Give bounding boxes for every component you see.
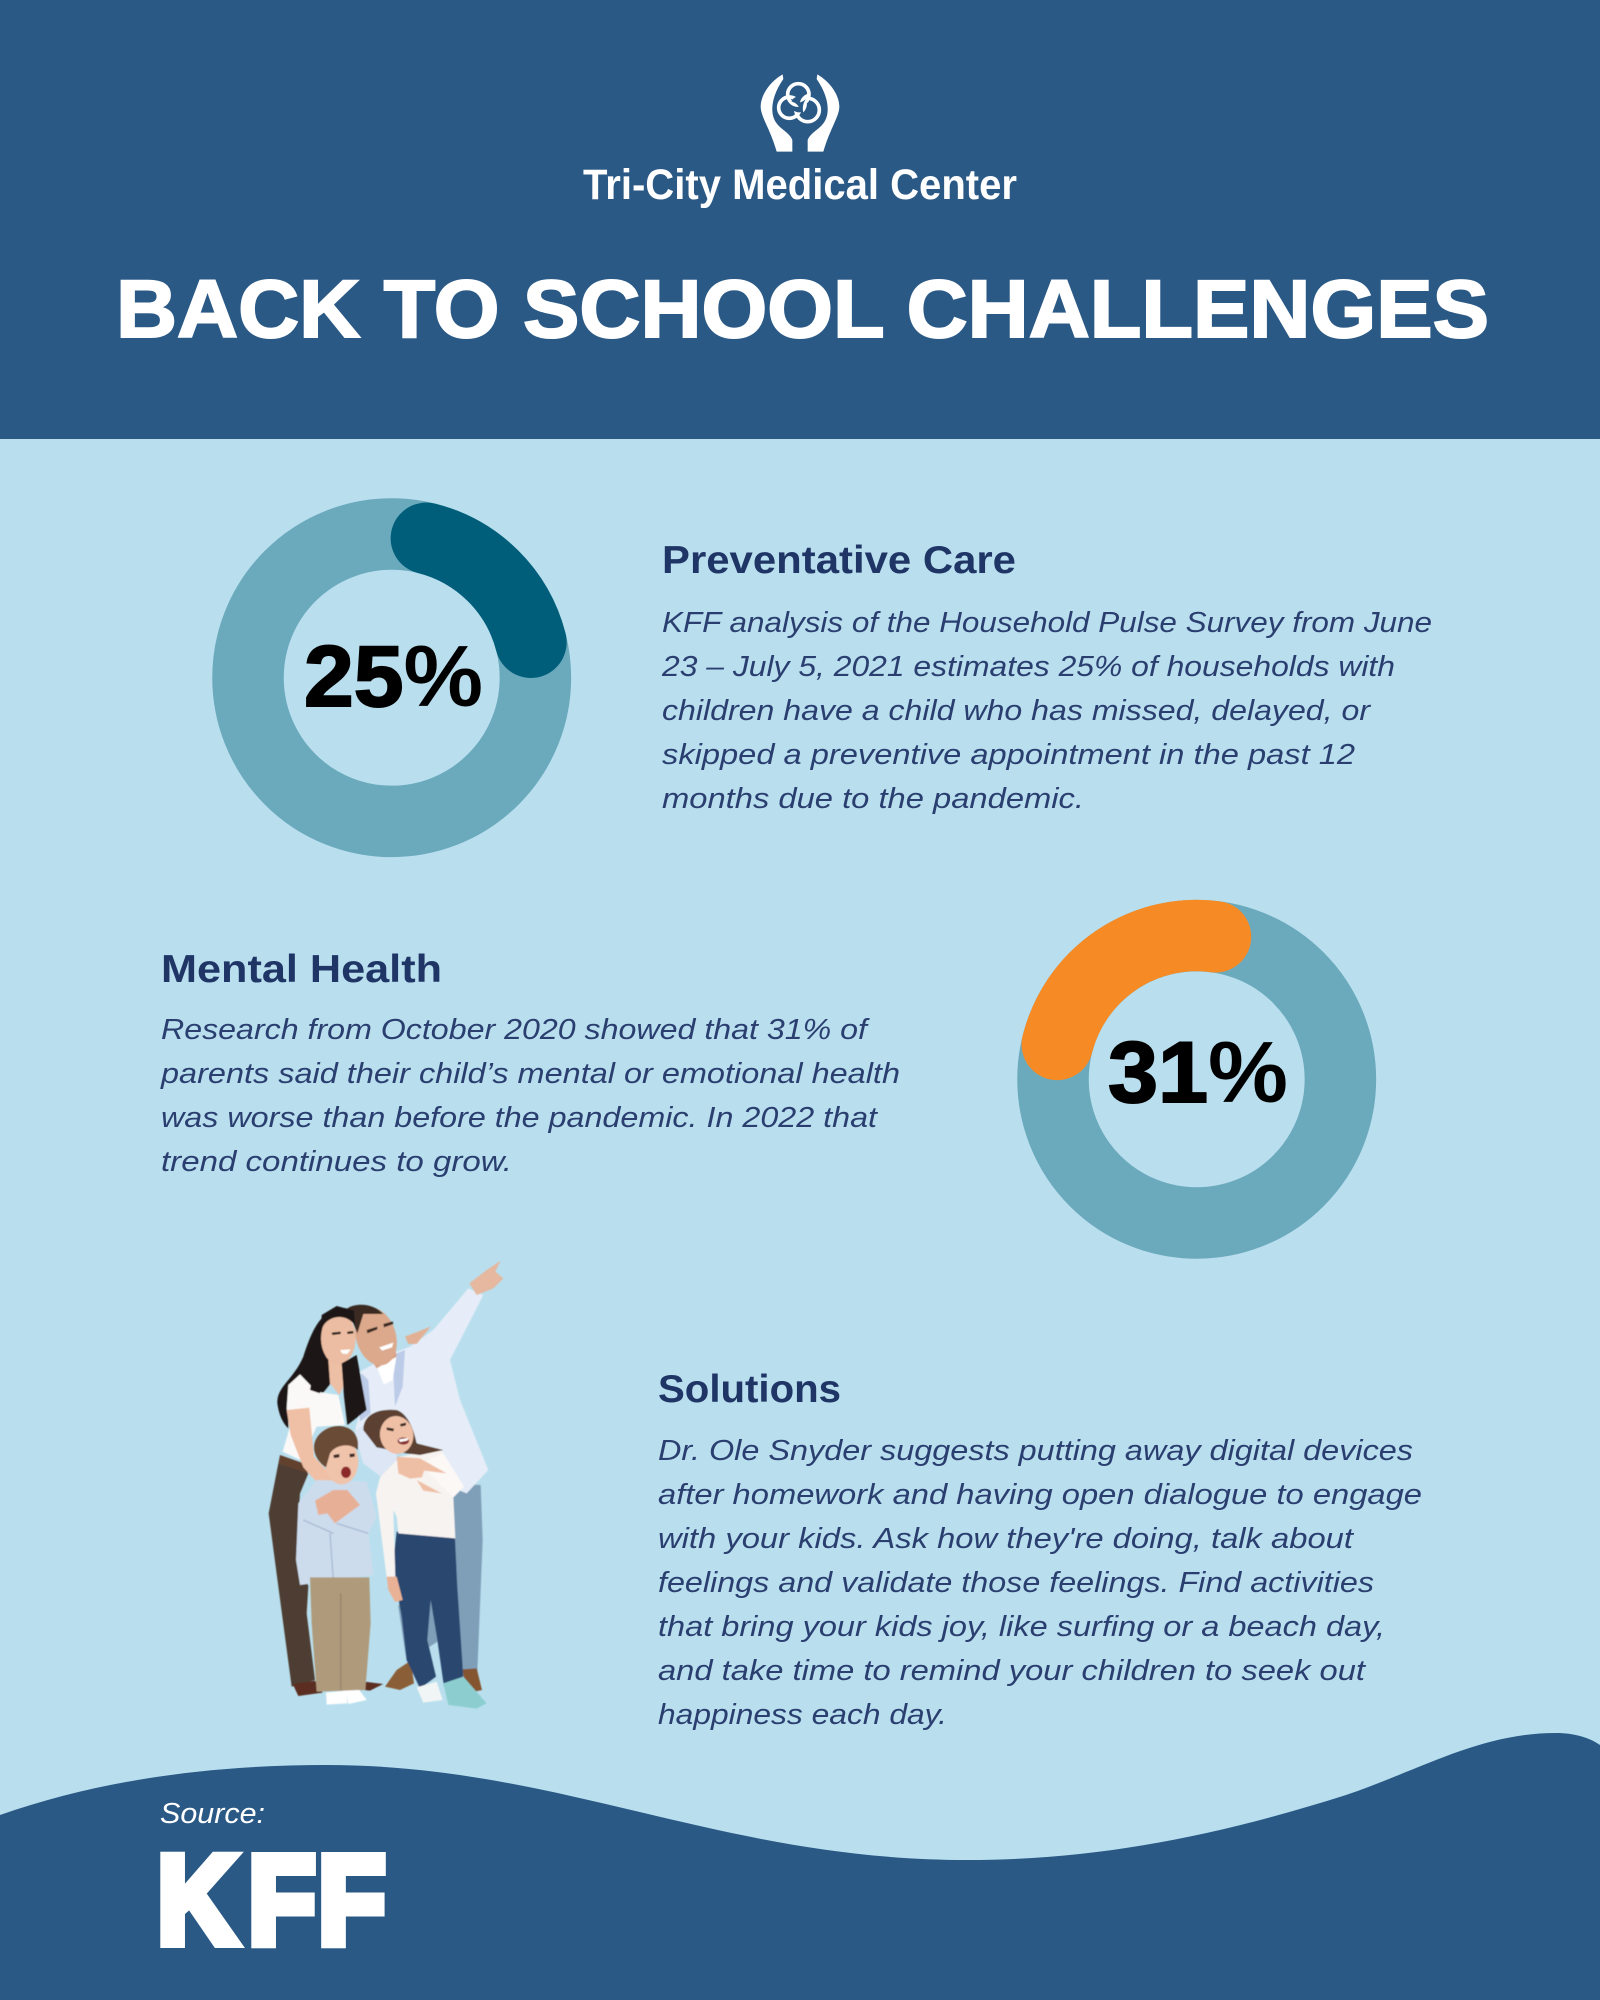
icon: hands holding knot [761,74,839,152]
body text: preventative care: 23 – July 5, 2021 estimates 25% of households with [661,651,1395,683]
donut chart: 31% [1053,936,1340,1223]
body text: solutions: happiness each day. [658,1699,947,1731]
title: BACK TO SCHOOL CHALLENGES [116,264,1489,355]
header band [0,0,1600,439]
body text: solutions: Dr. Ole Snyder suggests putting away digital devices [658,1435,1413,1467]
panel: preventative care [661,539,1432,815]
body text: solutions [658,1435,1422,1731]
source label: Source: [160,1798,265,1830]
footer wave [0,1733,1600,2000]
donut chart: 25% [248,534,535,821]
body text: solutions: with your kids. Ask how they're doing, talk about [658,1523,1355,1555]
panel: solutions [658,1368,1422,1731]
heading: preventative care: Preventative Care [662,539,1016,582]
body text: preventative care: KFF analysis of the Household Pulse Survey from June [662,607,1432,639]
body text: preventative care: children have a child who has missed, delayed, or [662,695,1371,727]
body text: solutions: feelings and validate those feelings. Find activities [658,1567,1374,1599]
body text: preventative care: months due to the pandemic. [662,783,1084,815]
body text: preventative care [661,607,1432,815]
heading: mental health: Mental Health [161,948,442,991]
photo: family pointing upward [269,1261,503,1709]
donut chart: 25%: 25% [304,629,483,725]
donut chart: 31%: 31% [1108,1025,1288,1121]
heading: solutions: Solutions [658,1368,841,1411]
body text: mental health: parents said their child’s mental or emotional health [160,1058,900,1090]
body text: mental health: trend continues to grow. [161,1146,512,1178]
panel: mental health [160,948,900,1178]
body text: mental health: was worse than before the pandemic. In 2022 that [161,1102,879,1134]
body text: mental health: Research from October 2020 showed that 31% of [161,1014,870,1046]
body text: preventative care: skipped a preventive appointment in the past 12 [662,739,1355,771]
body text: solutions: after homework and having open dialogue to engage [658,1479,1422,1511]
logo: Tri-City Medical Center [583,74,1017,209]
body text: solutions: that bring your kids joy, like surfing or a beach day, [658,1611,1385,1643]
body text: mental health [160,1014,900,1178]
logo: KFF: KFF [157,1829,385,1970]
body text: solutions: and take time to remind your children to seek out [658,1655,1367,1687]
logo wordmark: Tri-City Medical Center [583,161,1017,209]
